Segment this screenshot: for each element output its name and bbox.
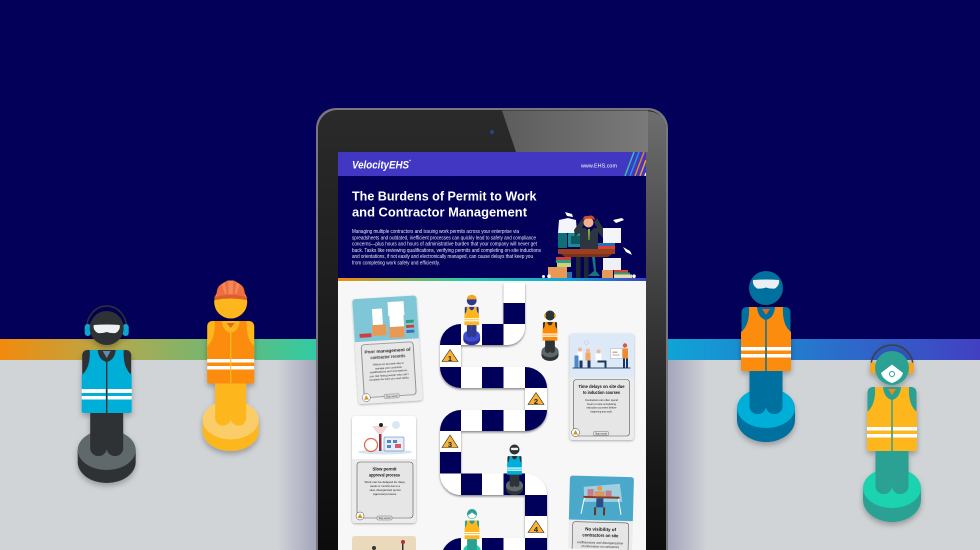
colour band right (666, 339, 980, 360)
vest stripes (207, 359, 254, 370)
card body: slow, disorganized permit (370, 488, 401, 492)
vest (867, 387, 917, 451)
worker legs (576, 257, 580, 278)
intro text: and orientations, if not easily and electronically managed, can cause delays that keep you (352, 254, 533, 260)
card badge (572, 428, 580, 436)
card: poor management of contractor records (352, 295, 423, 404)
card heading: contractors on site (582, 532, 619, 538)
card body: of information on contractors (581, 544, 620, 549)
base (78, 430, 136, 483)
card heading (582, 526, 619, 538)
small game piece: indigo base, orange vest (463, 295, 480, 345)
icon: warning 3: 3 (448, 440, 452, 449)
header bar (338, 152, 646, 176)
gradient divider (338, 278, 646, 281)
card heading (369, 466, 400, 478)
illustration: stressed office worker (542, 212, 636, 278)
left paper stack (558, 218, 577, 233)
card body (364, 480, 406, 496)
vest (207, 321, 254, 384)
card body (585, 398, 618, 413)
infographic screen (338, 152, 646, 550)
figure: green worker with yellow vest and mask (863, 345, 921, 522)
head (214, 286, 247, 318)
right paper stack (603, 228, 621, 243)
card image (352, 295, 419, 342)
icon: warning 2 (528, 392, 544, 406)
card body: induction courses before (586, 406, 617, 410)
card body: complete the work you need safely. (369, 376, 409, 382)
card text box (357, 462, 413, 518)
tie (588, 229, 590, 240)
card: slow permit approval process (352, 416, 416, 523)
goggles (94, 324, 120, 333)
tablet camera (490, 130, 494, 134)
small game piece: dark figure, blue vest (506, 444, 523, 495)
card body: qualifications and orientations, (370, 368, 408, 374)
card heading (364, 347, 411, 361)
logo: VelocityEHS (352, 160, 410, 172)
ear protection (85, 306, 129, 336)
card heading: No visibility of (585, 526, 617, 532)
torso (207, 321, 254, 361)
card body: Work can be delayed for days, (364, 480, 406, 484)
hero panel (338, 176, 646, 278)
card heading: approval process (369, 472, 400, 478)
card stop tag: Stop record (595, 432, 608, 436)
figure: dark worker with blue vest (78, 306, 136, 483)
chair and monitor (558, 233, 567, 248)
card heading: contractor records (370, 353, 406, 360)
colour band left (0, 339, 318, 360)
legs (215, 362, 246, 426)
segment: start and first bend (440, 283, 547, 388)
segment: second bend (440, 388, 547, 431)
small game piece: dark figure, orange vest (541, 310, 559, 361)
card body: you risk hiring people who can't (369, 372, 409, 378)
card body (577, 540, 624, 549)
base (737, 388, 795, 442)
small game piece: green figure, yellow vest (463, 509, 481, 550)
vest stripes (82, 389, 132, 400)
right boxes and books (603, 258, 621, 270)
intro text: concerns—plus hours and hours of administrative burden that your company will never get (352, 242, 538, 248)
card heading: Time delays on site due (578, 384, 625, 389)
card text box (361, 342, 416, 398)
hair (583, 216, 595, 220)
tablet right bezel (646, 111, 666, 550)
figure: yellow worker with orange vest and hard hat (203, 280, 259, 451)
worker torso and arms (574, 218, 604, 249)
head (584, 218, 594, 228)
card body: Without an accurate way to (373, 361, 404, 367)
card heading (578, 384, 625, 395)
card body: Inefficiencies and disorganization (577, 540, 624, 545)
card body: hours on site completing (587, 402, 616, 406)
segment: final rows (443, 538, 547, 550)
header stripes (625, 152, 646, 176)
chair base (588, 257, 600, 276)
vest stripes (867, 427, 917, 438)
intro text: from completing work safely and efficiently. (352, 260, 440, 266)
legs (749, 348, 783, 414)
head (749, 271, 783, 305)
vest (741, 307, 791, 371)
card badge (362, 393, 371, 402)
card heading: to induction courses (583, 390, 620, 395)
card heading: Poor management of (364, 347, 411, 355)
tablet device (316, 108, 668, 550)
game board path (440, 283, 547, 550)
card image (569, 476, 634, 521)
icon: warning 1 (442, 350, 458, 363)
background: navy upper area (0, 0, 980, 340)
base (863, 468, 921, 522)
card body: beginning any work. (590, 409, 613, 413)
card stop tag: Stop record (379, 517, 391, 520)
tablet glare (502, 110, 648, 152)
red books (598, 243, 615, 246)
card body: weeks or months due to a (370, 484, 400, 488)
vest (82, 350, 132, 413)
icon: warning 1: 1 (448, 354, 452, 363)
card body: approval process. (373, 492, 397, 496)
title (352, 190, 537, 220)
card image (352, 416, 416, 459)
segment: third bend (440, 431, 547, 538)
title: The Burdens of Permit to Work (352, 190, 537, 204)
legs (875, 428, 909, 494)
intro text: Managing multiple contractors and issuing work permits across your enterprise via (352, 229, 519, 235)
left boxes and books (556, 257, 571, 260)
ear protection (870, 345, 914, 374)
card stop tag: Stop record (386, 395, 399, 398)
head (90, 311, 124, 345)
flying papers (565, 212, 632, 255)
intro text: back. Tasks like reviewing qualifications, verifying permits and completing on-site inductions (352, 248, 541, 254)
page background (338, 281, 646, 550)
card heading: Slow permit (372, 466, 397, 472)
card body (368, 360, 409, 382)
torso (82, 350, 131, 390)
desk (558, 249, 615, 254)
legs (90, 388, 123, 456)
title: and Contractor Management (352, 206, 528, 220)
torso (742, 307, 790, 347)
base (203, 400, 259, 451)
goggles (753, 280, 779, 289)
intro text (352, 229, 541, 266)
icon: warning 4 (528, 520, 544, 534)
head (875, 351, 909, 385)
intro text: spreadsheets and outdated, inefficient processes can quickly lead to safety and compliance (352, 235, 536, 241)
icon: warning 4: 4 (534, 525, 539, 534)
dots (542, 275, 545, 278)
hard hat (214, 280, 247, 300)
card: no visibility of contractors on site (568, 476, 634, 550)
figure: blue worker with orange vest (737, 271, 795, 442)
card body: Contractors can often spend (585, 398, 618, 402)
card text box (574, 380, 630, 436)
card badge (356, 512, 364, 520)
mask (881, 364, 903, 383)
vest stripes (741, 347, 791, 358)
icon: warning 3 (442, 435, 458, 449)
background: grey floor (0, 360, 980, 550)
card: time delays on site (570, 334, 634, 440)
card image (570, 334, 634, 378)
card text box (572, 522, 629, 550)
card body: manage your contractor (375, 365, 402, 370)
torso (868, 387, 916, 427)
icon: warning 2: 2 (534, 397, 538, 406)
card: beige partial card (352, 536, 416, 550)
website: www.EHS.com (580, 164, 617, 170)
